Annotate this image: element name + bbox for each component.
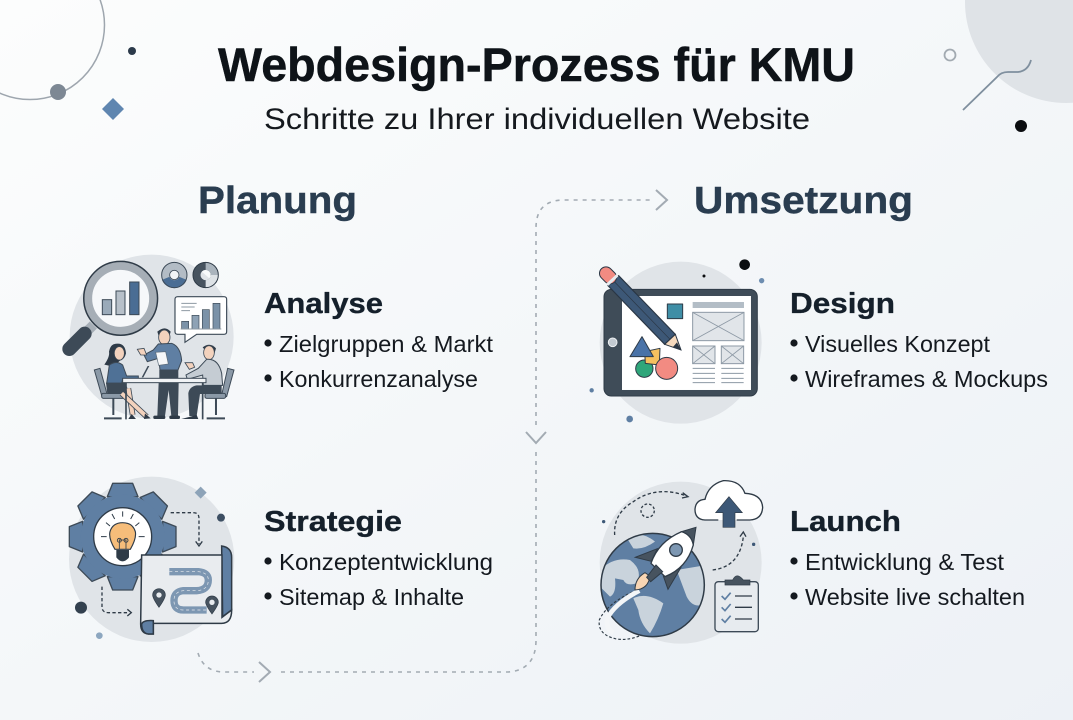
donut charts	[162, 262, 218, 288]
checklist clipboard	[715, 576, 758, 632]
text: Strategie: Konzeptentwicklung	[279, 549, 493, 575]
text: Design: Wireframes & Mockups	[805, 366, 1048, 392]
text: Strategie: Sitemap & Inhalte	[279, 584, 464, 610]
map	[141, 546, 232, 634]
chairs	[94, 368, 234, 418]
wireframes	[693, 302, 744, 383]
heading: Umsetzung: Umsetzung	[694, 180, 913, 222]
arrow: dashed connector downward chevron	[526, 432, 546, 443]
arrow: dashed connector from Strategie to Launch	[198, 450, 536, 682]
table	[123, 378, 206, 419]
orbit trail	[599, 590, 640, 639]
title: Webdesign-Prozess für KMU	[218, 38, 855, 91]
text: Launch: Launch	[790, 506, 901, 538]
shapes	[630, 304, 683, 379]
text: Launch	[790, 506, 1025, 610]
text: Design: Visuelles Konzept	[805, 331, 990, 357]
text: Launch: Website live schalten	[805, 584, 1025, 610]
heading: Planung: Planung	[198, 180, 357, 222]
text: Launch: Entwicklung & Test	[805, 549, 1004, 575]
text: Design	[790, 288, 1048, 392]
text: Strategie: Strategie	[264, 506, 402, 538]
text: Analyse: Analyse	[264, 288, 383, 320]
pencil	[606, 273, 681, 350]
decoration: top-right shapes	[944, 0, 1073, 132]
woman	[104, 344, 151, 419]
magnifying glass	[69, 266, 153, 349]
text: Design: Design	[790, 288, 895, 320]
dashed flight paths	[615, 492, 746, 570]
gear with light bulb	[69, 483, 176, 590]
text: Analyse: Zielgruppen & Markt	[279, 331, 493, 357]
rocket	[635, 527, 696, 590]
icon: Analyse team meeting	[69, 255, 234, 419]
speech bubble chart	[175, 297, 227, 342]
dashed arrows	[102, 513, 202, 616]
subtitle: Schritte zu Ihrer individuellen Website	[264, 103, 810, 136]
globe	[600, 533, 707, 637]
tablet	[604, 289, 757, 396]
standing man	[137, 328, 182, 419]
decoration: top-left shapes	[0, 0, 136, 120]
text: Strategie	[264, 506, 493, 610]
text: Analyse: Konkurrenzanalyse	[279, 366, 478, 392]
icon: Design tablet with pencil	[589, 259, 764, 424]
icon: Strategie gear and map	[69, 477, 234, 642]
cloud upload	[695, 481, 763, 527]
arrow: dashed connector up to Umsetzung	[536, 190, 667, 425]
seated man	[181, 345, 223, 419]
text: Analyse	[264, 288, 493, 392]
icon: Launch globe, rocket, cloud, checklist	[599, 481, 763, 644]
